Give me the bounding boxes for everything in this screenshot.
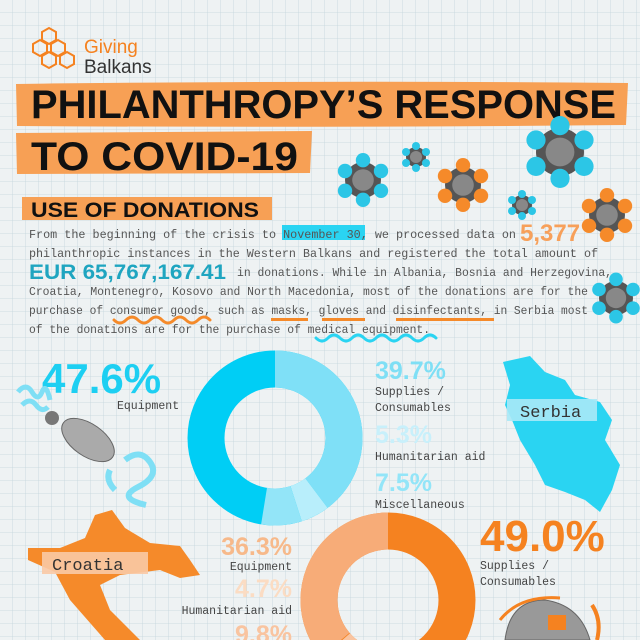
paragraph: of the donations are for the purchase of medical equipment. (29, 323, 430, 337)
paragraph (29, 220, 612, 341)
paragraph: From the beginning of the crisis to November 30, we processed data on (29, 228, 516, 242)
paragraph: in donations. While in Albania, Bosnia and Herzegovina, (237, 266, 612, 280)
blue donut chart (Serbia) (206, 369, 344, 507)
Serbia labels: Miscellaneous (375, 499, 465, 512)
title: PHILANTHROPY’S RESPONSE (31, 83, 616, 127)
icon: ventilator bag (18, 387, 153, 505)
heading: use of donations: USE OF DONATIONS (31, 199, 259, 222)
map: Serbia: Serbia (520, 404, 581, 423)
title: TO COVID-19 (31, 135, 298, 179)
icon: mask (500, 598, 599, 640)
Serbia labels: Consumables (375, 402, 451, 415)
Serbia labels: 7.5% (375, 469, 432, 497)
Serbia labels: 47.6% (42, 355, 161, 402)
Croatia labels: Consumables (480, 576, 556, 589)
Croatia labels: 49.0% (480, 512, 605, 561)
Serbia labels: Supplies / (375, 386, 444, 399)
paragraph: 5,377 (520, 220, 580, 247)
Serbia labels: 39.7% (375, 357, 446, 385)
Serbia labels: 5.3% (375, 421, 432, 449)
map: Croatia: Croatia (52, 557, 123, 576)
orange donut chart (Croatia) (319, 531, 457, 640)
paragraph: philanthropic instances in the Western Balkans and registered the total amount of (29, 247, 598, 261)
Croatia labels: Humanitarian aid (182, 605, 292, 618)
viruses (338, 116, 640, 324)
logo: Balkans (84, 57, 152, 78)
logo (33, 28, 152, 78)
Croatia labels: 4.7% (235, 575, 292, 603)
Croatia labels: Equipment (230, 561, 292, 574)
Serbia labels: Equipment (117, 400, 179, 413)
map: Croatia (28, 510, 200, 640)
Croatia labels (182, 512, 605, 640)
paragraph: purchase of consumer goods, such as masks, gloves and disinfectants, in Serbia most (29, 304, 588, 318)
Croatia labels: Supplies / (480, 560, 549, 573)
Croatia labels: 36.3% (221, 533, 292, 561)
paragraph: Croatia, Montenegro, Kosovo and North Macedonia, most of the donations are for the (29, 285, 588, 299)
map: Serbia (503, 356, 620, 512)
Serbia labels (42, 355, 485, 512)
paragraph: EUR 65,767,167.41 (29, 261, 226, 284)
Serbia labels: Humanitarian aid (375, 451, 485, 464)
logo: Giving (84, 37, 138, 58)
title (16, 82, 628, 179)
